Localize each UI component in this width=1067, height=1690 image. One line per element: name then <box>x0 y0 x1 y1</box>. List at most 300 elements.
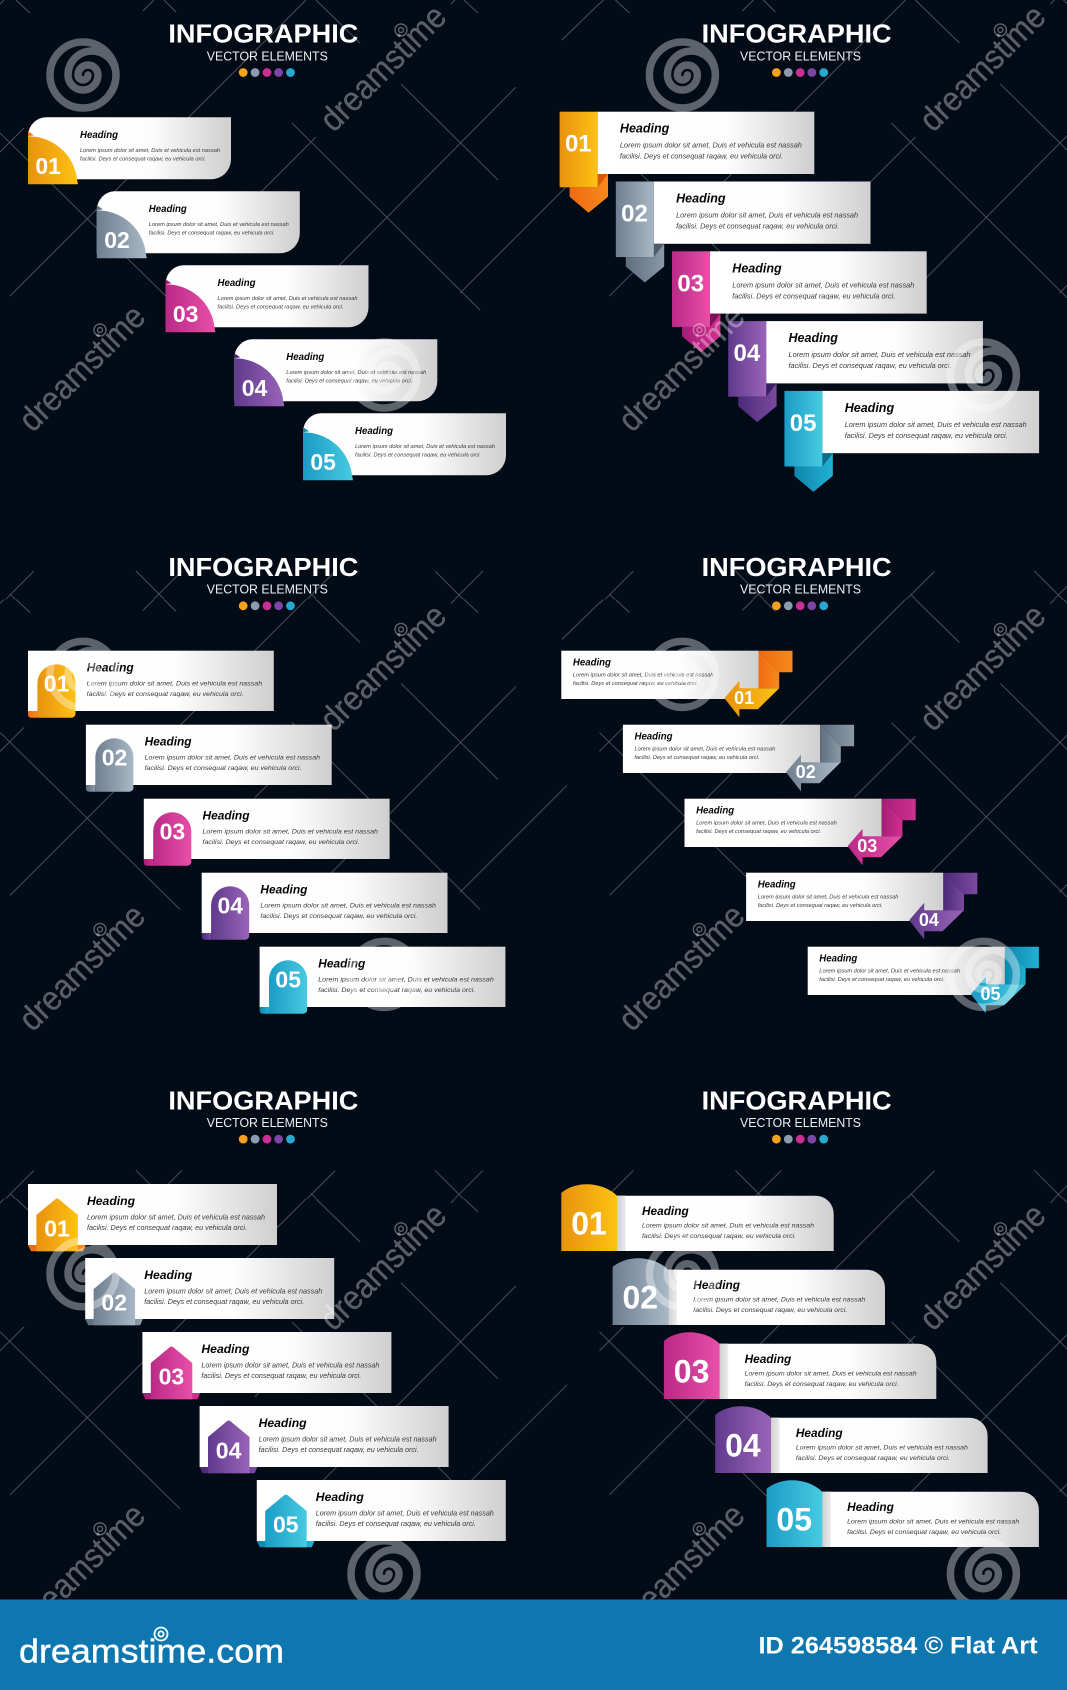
title block <box>702 1085 892 1144</box>
body text: facilisi. Deys et consequat raqaw, eu vehicula orci. <box>847 1529 1001 1536</box>
heading: Heading <box>696 805 734 816</box>
arrow <box>909 903 964 939</box>
heading: Heading <box>355 426 393 437</box>
bottom strip <box>202 933 211 940</box>
panel: ribbon arrow cards <box>560 19 1039 492</box>
heading: Heading <box>149 204 187 215</box>
card body <box>668 1270 885 1325</box>
card 05 <box>260 947 505 1014</box>
number: 05 <box>776 1502 812 1538</box>
badge <box>265 1495 307 1547</box>
heading: Heading <box>758 879 796 890</box>
arrow <box>848 829 902 865</box>
body text <box>758 894 898 909</box>
card body <box>598 112 814 174</box>
card 04 <box>200 1406 449 1473</box>
fold <box>822 453 833 466</box>
number: 02 <box>102 745 127 771</box>
subtitle: VECTOR ELEMENTS <box>207 583 328 597</box>
title block <box>168 1085 359 1144</box>
number: 05 <box>273 1512 299 1538</box>
number: 02 <box>101 1290 127 1316</box>
number: 01 <box>35 153 61 179</box>
body text <box>676 212 858 230</box>
body text: Lorem ipsum dolor sit amet, Duis et vehicula est nassah <box>259 1436 437 1443</box>
body text: Lorem ipsum dolor sit amet, Duis et vehicula est nassah <box>676 212 858 220</box>
card body <box>144 799 390 859</box>
number: 01 <box>734 688 754 708</box>
title block <box>702 19 892 77</box>
body text: facilisi. Deys et consequat raqaw, eu vehicula orci. <box>758 903 883 909</box>
number: 03 <box>857 836 877 856</box>
foot strip <box>28 1245 86 1251</box>
body text: facilisi. Deys et consequat raqaw, eu vehicula orci. <box>286 379 412 385</box>
heading: Heading <box>732 261 782 275</box>
body text <box>316 1510 494 1528</box>
body text: facilisi. Deys et consequat raqaw, eu vehicula orci. <box>635 755 760 761</box>
card body <box>200 1406 449 1467</box>
body text <box>144 1288 322 1306</box>
watermark text: dreamstime <box>912 1196 1053 1338</box>
body text <box>260 902 436 920</box>
number: 02 <box>104 227 130 253</box>
body text <box>145 754 320 772</box>
inner strip <box>617 1196 626 1251</box>
body text <box>355 444 495 459</box>
card 02 <box>97 191 300 258</box>
colour dots <box>772 68 828 77</box>
watermark small marks <box>94 24 1006 1535</box>
inner strip <box>771 1418 780 1473</box>
body text: Lorem ipsum dolor sit amet, Duis et vehicula est nassah <box>635 746 775 752</box>
body text: facilisi. Deys et consequat raqaw, eu vehicula orci. <box>573 681 698 687</box>
watermark text: dreamstime <box>611 298 752 439</box>
number: 01 <box>565 131 592 158</box>
body text: facilisi. Deys et consequat raqaw, eu vehicula orci. <box>845 433 1008 440</box>
card body <box>684 799 882 847</box>
card 01 <box>28 651 274 718</box>
watermark text: dreamstime <box>12 298 153 439</box>
badge fold <box>97 205 103 210</box>
heading: Heading <box>144 1268 193 1282</box>
card body <box>202 873 448 933</box>
badge <box>784 391 822 466</box>
image id and credit: ID 264598584 © Flat Art <box>758 1633 1038 1659</box>
body text: facilisi. Deys et consequat raqaw, eu vehicula orci. <box>642 1233 796 1240</box>
title: INFOGRAPHIC <box>168 19 359 49</box>
fold <box>766 383 777 397</box>
body text: Lorem ipsum dolor sit amet, Duis et vehicula est nassah <box>819 968 960 974</box>
badge <box>560 112 598 187</box>
card 04 <box>715 1406 988 1473</box>
number: 04 <box>725 1428 761 1464</box>
card 02 <box>616 182 870 282</box>
body text: facilisi. Deys et consequat raqaw, eu vehicula orci. <box>218 305 344 311</box>
badge <box>97 210 147 258</box>
body text: Lorem ipsum dolor sit amet, Duis et vehicula est nassah <box>355 444 495 450</box>
watermark text: dreamstime <box>12 1496 153 1638</box>
card body <box>822 1492 1039 1547</box>
vertical band <box>758 651 779 688</box>
body text: facilisi. Deys et consequat raqaw, eu vehicula orci. <box>620 154 783 161</box>
body text <box>620 143 802 161</box>
card body <box>822 391 1039 453</box>
body text <box>201 1362 380 1380</box>
badge <box>151 1347 192 1399</box>
title: INFOGRAPHIC <box>168 1085 359 1115</box>
body text <box>87 680 262 698</box>
footer bar <box>0 1600 1067 1690</box>
heading: Heading <box>693 1278 740 1292</box>
heading: Heading <box>87 1194 136 1208</box>
heading: Heading <box>260 882 308 896</box>
badge <box>234 358 284 406</box>
number: 03 <box>677 270 704 297</box>
number: 03 <box>159 1364 184 1390</box>
title block <box>702 552 892 610</box>
heading: Heading <box>796 1426 843 1440</box>
colour dots <box>772 601 828 610</box>
inner strip <box>668 1270 677 1325</box>
badge <box>208 1421 250 1473</box>
body text: Lorem ipsum dolor sit amet, Duis et vehicula est nassah <box>758 894 898 900</box>
body text: facilisi. Deys et consequat raqaw, eu vehicula orci. <box>87 691 244 698</box>
body text: Lorem ipsum dolor sit amet, Duis et vehicula est nassah <box>696 820 837 826</box>
badge <box>28 136 78 184</box>
body text <box>642 1222 814 1240</box>
down arrow <box>794 453 833 492</box>
body text <box>318 976 494 994</box>
body text: facilisi. Deys et consequat raqaw, eu vehicula orci. <box>145 765 302 772</box>
heading: Heading <box>620 122 670 136</box>
body text: Lorem ipsum dolor sit amet, Duis et vehicula est nassah <box>789 352 971 359</box>
body text <box>819 968 960 983</box>
subtitle: VECTOR ELEMENTS <box>207 49 328 63</box>
bottom strip <box>28 711 37 718</box>
card 02 <box>86 725 332 792</box>
body text: Lorem ipsum dolor sit amet, Duis et vehicula est nassah <box>144 1288 322 1295</box>
panel: house badge cards <box>28 1085 506 1547</box>
number: 03 <box>160 819 185 845</box>
card 01 <box>28 1184 277 1251</box>
body text: Lorem ipsum dolor sit amet, Duis et vehicula est nassah <box>316 1510 494 1517</box>
heading: Heading <box>316 1490 364 1504</box>
body text <box>80 148 220 163</box>
number: 01 <box>44 1216 70 1242</box>
colour dots <box>239 68 295 77</box>
card 03 <box>144 799 390 866</box>
body text <box>693 1296 866 1314</box>
card 01 <box>560 112 814 213</box>
card 03 <box>684 799 916 865</box>
card body <box>234 339 437 401</box>
badge fold <box>28 131 34 136</box>
number: 03 <box>674 1354 709 1390</box>
title: INFOGRAPHIC <box>702 1085 892 1115</box>
card body <box>97 191 300 253</box>
badge <box>95 738 133 792</box>
body text: Lorem ipsum dolor sit amet, Duis et vehicula est nassah <box>201 1362 380 1369</box>
down arrow <box>626 244 664 282</box>
panel: rounded tab cards <box>28 19 506 480</box>
number: 04 <box>216 1438 242 1464</box>
badge <box>153 812 191 866</box>
badge <box>269 960 307 1014</box>
card body <box>766 321 983 383</box>
watermark text: dreamstime <box>12 897 153 1038</box>
number: 04 <box>242 375 267 401</box>
card 02 <box>623 725 854 791</box>
body text <box>788 352 971 370</box>
body text <box>732 282 914 300</box>
body text: facilisi. Deys et consequat raqaw, eu vehicula orci. <box>87 1225 247 1232</box>
badge <box>36 1199 78 1251</box>
watermark text: dreamstime <box>912 597 1053 738</box>
heading: Heading <box>573 657 611 668</box>
body text <box>696 820 837 835</box>
footer logo text: dreamstime.com <box>19 1633 284 1670</box>
body text: facilisi. Deys et consequat raqaw, eu vehicula orci. <box>796 1455 950 1462</box>
body text <box>286 370 426 385</box>
card body <box>771 1418 988 1473</box>
heading: Heading <box>676 192 726 206</box>
body text: facilisi. Deys et consequat raqaw, eu vehicula orci. <box>144 1299 304 1306</box>
card 04 <box>234 339 437 406</box>
down arrow <box>682 314 720 352</box>
footer logo spiral <box>154 1628 168 1640</box>
colour dots <box>239 1135 295 1144</box>
body text: Lorem ipsum dolor sit amet, Duis et vehicula est nassah <box>745 1370 917 1377</box>
badge <box>664 1332 720 1399</box>
number: 05 <box>275 967 301 993</box>
heading: Heading <box>203 808 250 822</box>
badge <box>766 1480 822 1547</box>
body text: facilisi. Deys et consequat raqaw, eu vehicula orci. <box>745 1381 899 1388</box>
card body <box>720 1344 936 1399</box>
vertical band <box>820 725 841 762</box>
body text: Lorem ipsum dolor sit amet, Duis et vehicula est nassah <box>847 1518 1019 1525</box>
card body <box>617 1196 834 1251</box>
body text <box>149 222 289 237</box>
number: 05 <box>310 449 336 475</box>
heading: Heading <box>218 278 256 289</box>
card body <box>746 873 943 921</box>
badge <box>672 251 710 327</box>
heading: Heading <box>745 1352 791 1366</box>
heading: Heading <box>635 731 673 742</box>
body text: Lorem ipsum dolor sit amet, Duis et vehicula est nassah <box>149 222 289 228</box>
number: 04 <box>218 893 243 919</box>
number: 02 <box>623 1280 658 1316</box>
badge <box>37 664 76 718</box>
body text: Lorem ipsum dolor sit amet, Duis et vehicula est nassah <box>642 1222 814 1229</box>
card 04 <box>728 321 983 422</box>
card body <box>561 651 758 699</box>
down arrow <box>738 383 777 422</box>
body text <box>845 422 1027 440</box>
body text: facilisi. Deys et consequat raqaw, eu vehicula orci. <box>260 913 418 920</box>
watermark text: dreamstime <box>313 1196 454 1338</box>
body text: facilisi. Deys et consequat raqaw, eu vehicula orci. <box>676 224 839 230</box>
card body <box>710 251 927 314</box>
body text: Lorem ipsum dolor sit amet, Duis et vehicula est nassah <box>218 296 358 302</box>
subtitle: VECTOR ELEMENTS <box>740 49 861 63</box>
vertical band <box>882 799 902 836</box>
card 02 <box>613 1258 885 1325</box>
bottom strip <box>260 1007 269 1014</box>
body text: Lorem ipsum dolor sit amet, Duis et vehicula est nassah <box>845 422 1027 429</box>
number: 05 <box>790 410 816 437</box>
top fold <box>943 873 977 894</box>
body text: Lorem ipsum dolor sit amet, Duis et vehicula est nassah <box>620 143 802 150</box>
number: 03 <box>173 301 198 327</box>
card 05 <box>303 413 506 480</box>
body text <box>745 1370 917 1388</box>
badge <box>616 182 654 257</box>
card 04 <box>202 873 448 940</box>
fold <box>654 244 664 257</box>
body text: Lorem ipsum dolor sit amet, Duis et vehicula est nassah <box>693 1296 866 1303</box>
vertical band <box>1005 947 1026 984</box>
arrow <box>724 681 779 717</box>
body text: facilisi. Deys et consequat raqaw, eu vehicula orci. <box>201 1373 361 1380</box>
card body <box>623 725 820 773</box>
title: INFOGRAPHIC <box>168 552 359 582</box>
card body <box>28 1184 277 1245</box>
badge <box>94 1273 135 1325</box>
title: INFOGRAPHIC <box>702 552 892 582</box>
heading: Heading <box>642 1204 689 1218</box>
body text <box>796 1444 968 1462</box>
subtitle: VECTOR ELEMENTS <box>207 1116 328 1130</box>
colour dots <box>772 1135 828 1144</box>
subtitle: VECTOR ELEMENTS <box>740 1116 861 1130</box>
body text <box>259 1436 437 1454</box>
arrow <box>971 977 1026 1013</box>
card body <box>303 413 506 475</box>
top fold <box>1005 947 1039 968</box>
panel: arched badge cards <box>28 552 505 1014</box>
card 02 <box>85 1258 334 1325</box>
card body <box>808 947 1005 995</box>
top fold <box>758 651 792 672</box>
top fold <box>882 799 916 820</box>
card 01 <box>561 651 792 717</box>
card 05 <box>784 391 1039 492</box>
card 05 <box>766 1480 1039 1547</box>
watermark text: dreamstime <box>611 1496 752 1638</box>
heading: Heading <box>845 401 894 415</box>
body text <box>87 1214 265 1232</box>
card body <box>28 117 231 179</box>
number: 05 <box>980 984 1001 1004</box>
heading: Heading <box>318 956 366 970</box>
body text: Lorem ipsum dolor sit amet, Duis et vehicula est nassah <box>87 680 262 687</box>
body text: Lorem ipsum dolor sit amet, Duis et vehicula est nassah <box>145 754 320 761</box>
body text: facilisi. Deys et consequat raqaw, eu vehicula orci. <box>203 839 360 846</box>
panel: folded arrow cards <box>561 552 1039 1013</box>
number: 02 <box>621 200 648 228</box>
body text <box>202 828 378 846</box>
card body <box>257 1480 506 1541</box>
panel: big number tab cards <box>561 1085 1039 1547</box>
heading: Heading <box>259 1416 307 1430</box>
badge fold <box>234 353 240 358</box>
watermark text: dreamstime <box>313 597 454 738</box>
number: 01 <box>44 671 70 697</box>
title: INFOGRAPHIC <box>702 19 892 49</box>
foot strip <box>85 1319 143 1325</box>
bottom strip <box>86 785 95 792</box>
body text: facilisi. Deys et consequat raqaw, eu vehicula orci. <box>355 453 481 459</box>
badge <box>728 321 766 397</box>
card body <box>28 651 274 711</box>
card body <box>260 947 505 1007</box>
body text: facilisi. Deys et consequat raqaw, eu vehicula orci. <box>732 293 895 300</box>
card body <box>166 265 368 327</box>
subtitle: VECTOR ELEMENTS <box>740 583 861 597</box>
body text <box>573 672 714 687</box>
card 04 <box>746 873 977 939</box>
heading: Heading <box>286 352 324 363</box>
title block <box>168 552 359 610</box>
colour dots <box>239 601 295 610</box>
badge fold <box>166 279 172 284</box>
inner strip <box>720 1344 728 1399</box>
card 05 <box>257 1480 506 1547</box>
arrow <box>786 755 841 791</box>
heading: Heading <box>789 331 838 345</box>
card 05 <box>808 947 1039 1013</box>
body text <box>847 1518 1019 1536</box>
number: 01 <box>571 1206 607 1242</box>
heading: Heading <box>80 130 118 141</box>
card 03 <box>142 1332 391 1399</box>
title block <box>168 19 359 77</box>
watermark text: dreamstime <box>611 897 752 1038</box>
body text <box>634 746 775 761</box>
down arrow <box>570 174 608 213</box>
heading: Heading <box>819 953 857 964</box>
body text: Lorem ipsum dolor sit amet, Duis et vehicula est nassah <box>318 976 494 983</box>
body text: Lorem ipsum dolor sit amet, Duis et vehicula est nassah <box>796 1444 968 1451</box>
body text: facilisi. Deys et consequat raqaw, eu vehicula orci. <box>693 1307 847 1314</box>
body text: Lorem ipsum dolor sit amet, Duis et vehicula est nassah <box>732 282 914 289</box>
badge <box>561 1184 617 1251</box>
card 03 <box>664 1332 936 1399</box>
fold <box>710 314 720 327</box>
body text: Lorem ipsum dolor sit amet, Duis et vehicula est nassah <box>573 672 714 678</box>
body text: Lorem ipsum dolor sit amet, Duis et vehicula est nassah <box>87 1214 265 1221</box>
body text: Lorem ipsum dolor sit amet, Duis et vehicula est nassah <box>260 902 436 909</box>
badge <box>166 284 216 332</box>
inner strip <box>822 1492 831 1547</box>
body text: Lorem ipsum dolor sit amet, Duis et vehicula est nassah <box>286 370 426 376</box>
body text: facilisi. Deys et consequat raqaw, eu vehicula orci. <box>819 977 944 983</box>
body text: facilisi. Deys et consequat raqaw, eu vehicula orci. <box>696 829 821 835</box>
body text: facilisi. Deys et consequat raqaw, eu vehicula orci. <box>789 363 952 370</box>
card 01 <box>28 117 231 184</box>
foot strip <box>257 1541 314 1547</box>
top fold <box>820 725 854 746</box>
heading: Heading <box>145 734 192 748</box>
card body <box>86 725 332 785</box>
badge fold <box>303 427 309 432</box>
foot strip <box>142 1393 200 1399</box>
badge <box>211 886 249 940</box>
body text: Lorem ipsum dolor sit amet, Duis et vehicula est nassah <box>80 148 220 154</box>
fold <box>598 174 608 187</box>
